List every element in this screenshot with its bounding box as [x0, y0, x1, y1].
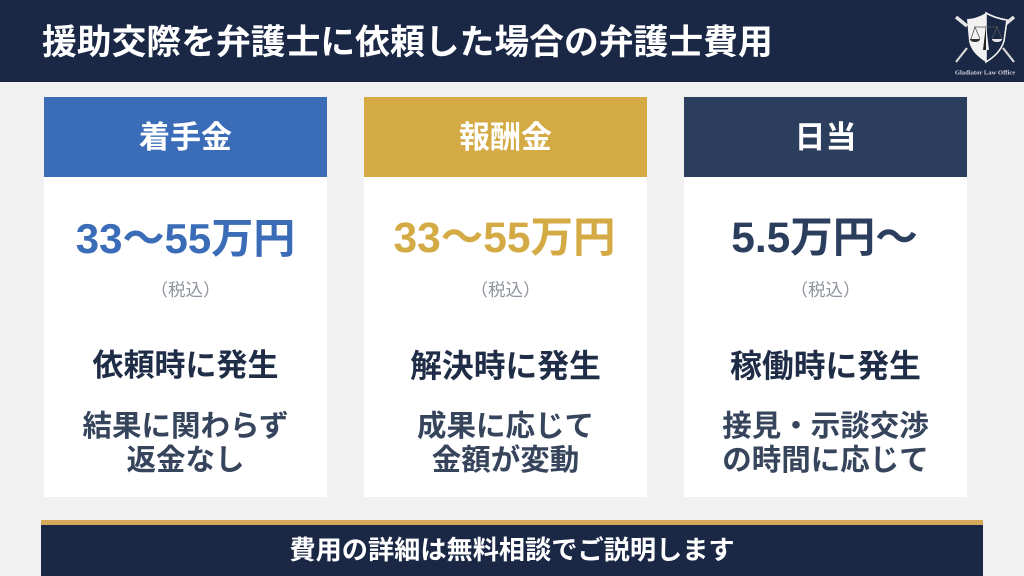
description: 接見・示談交渉: [722, 410, 929, 442]
description: 返金なし: [126, 444, 244, 477]
icon: law office shield logo: [955, 12, 1015, 76]
description: 金額が変動: [432, 444, 579, 477]
description: [722, 410, 929, 477]
price: 5.5万円〜: [731, 215, 918, 262]
panel heading: 報酬金: [364, 97, 647, 177]
description: 結果に関わらず: [83, 410, 288, 442]
description: [417, 410, 594, 477]
tax note: （税込）: [790, 280, 860, 300]
timing: 解決時に発生: [410, 348, 601, 384]
panel: 報酬金: [364, 97, 647, 497]
panel heading: 着手金: [44, 97, 327, 177]
panel heading: 日当: [684, 97, 967, 177]
footer banner: 費用の詳細は無料相談でご説明します: [289, 535, 735, 565]
panel: 日当: [684, 97, 967, 497]
timing: 依頼時に発生: [92, 348, 278, 383]
description: [83, 410, 288, 477]
price: 33〜55万円: [393, 215, 616, 262]
icon: law office shield logo: Gladiator Law Office: [955, 70, 1015, 76]
tax note: （税込）: [470, 280, 540, 300]
panel heading: 着手金: 着手金: [139, 120, 232, 155]
title: 援助交際を弁護士に依頼した場合の弁護士費用: [42, 23, 773, 62]
description: の時間に応じて: [722, 444, 929, 477]
timing: 稼働時に発生: [730, 348, 921, 384]
tax note: （税込）: [150, 280, 220, 300]
price: 33〜55万円: [76, 215, 295, 262]
footer banner: [41, 520, 983, 576]
panel heading: 日当: 日当: [794, 120, 856, 155]
header band: [0, 0, 1024, 82]
description: 成果に応じて: [417, 410, 594, 442]
panel: 着手金: [44, 97, 327, 497]
panel heading: 報酬金: 報酬金: [459, 120, 552, 155]
